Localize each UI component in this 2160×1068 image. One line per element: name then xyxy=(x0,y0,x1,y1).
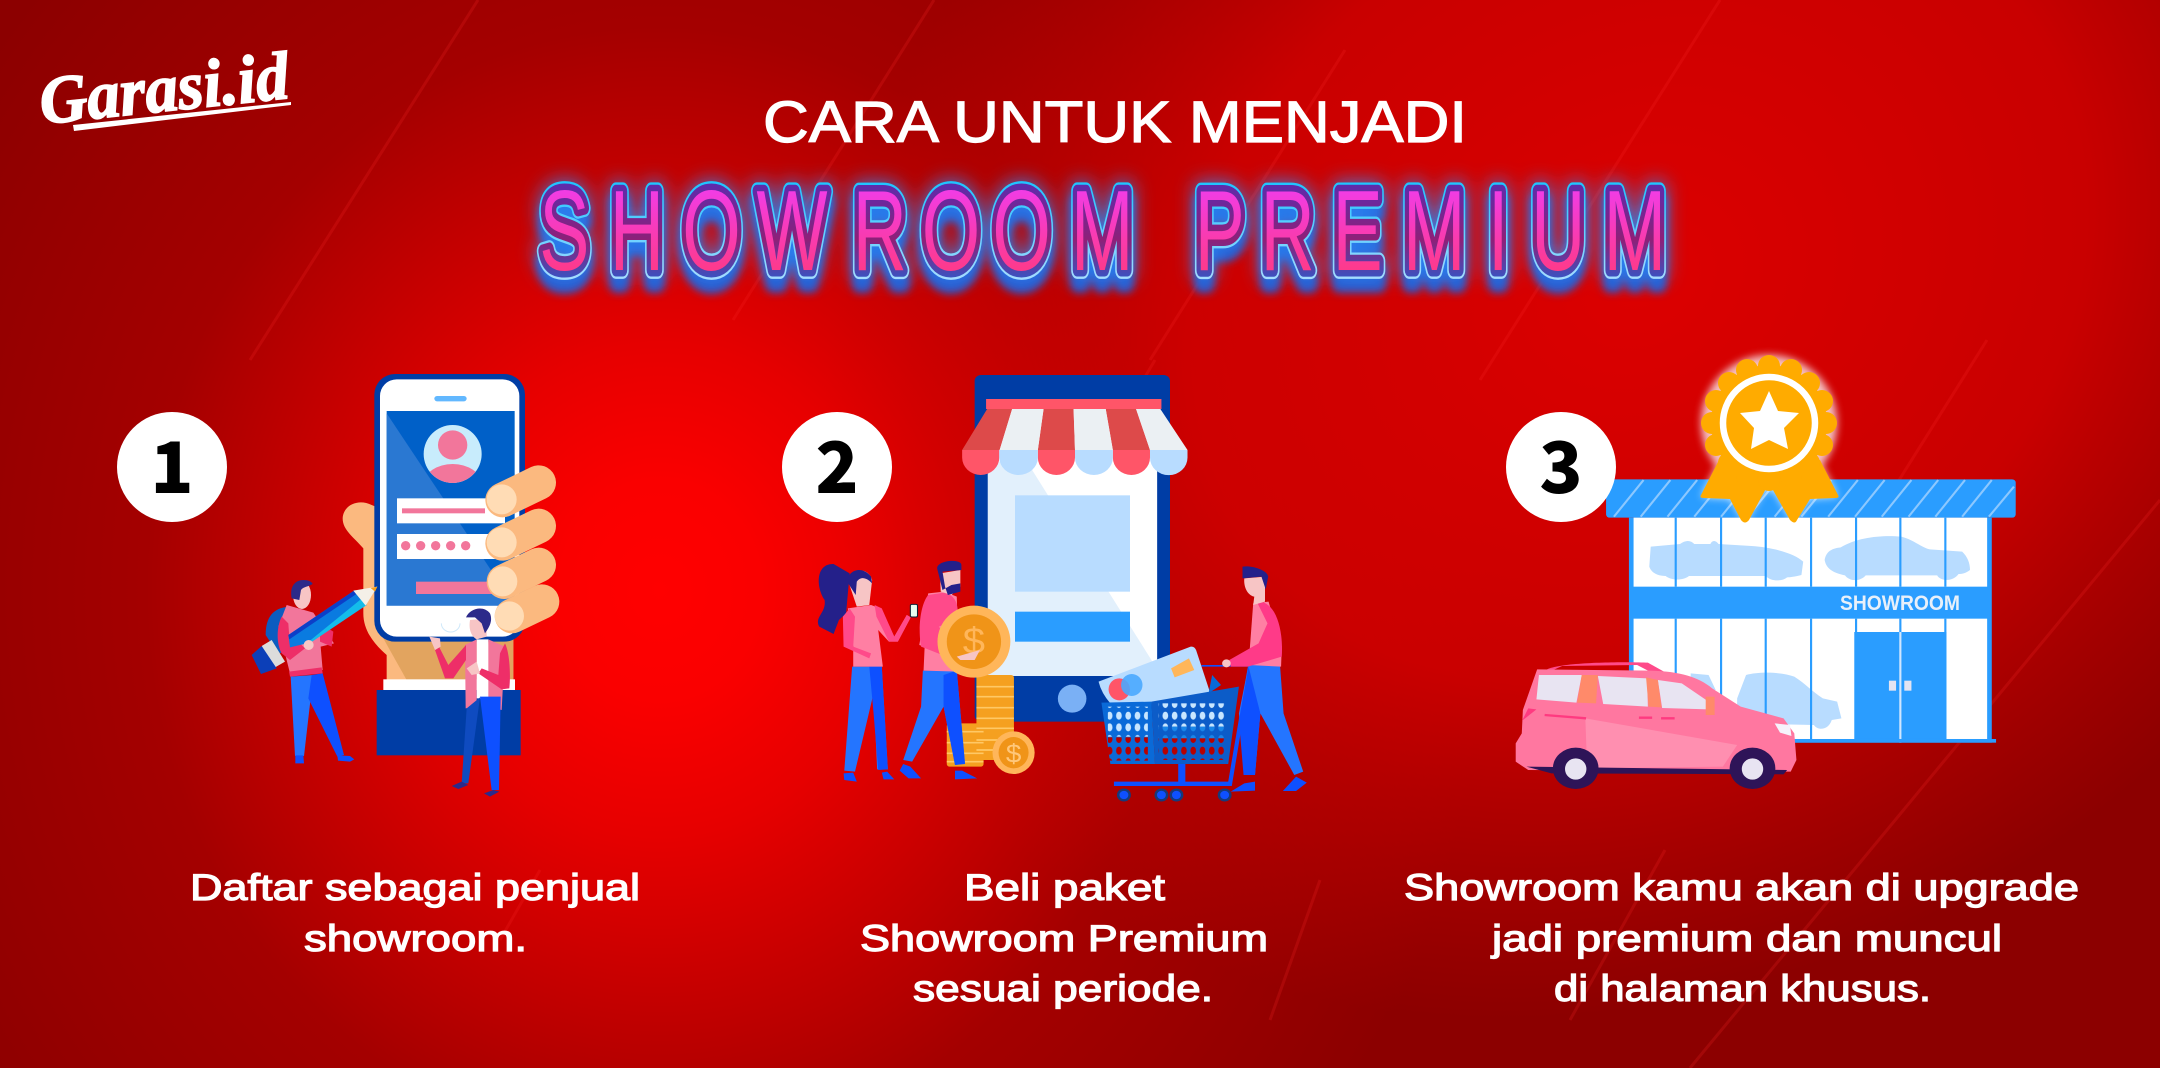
phone xyxy=(374,374,525,642)
neon heading: Showroom Premium: SHOWROOM PREMIUM xyxy=(539,180,1666,307)
number badge 3 and building xyxy=(1506,355,2016,789)
illustration: step 1 registration on phone xyxy=(252,374,542,797)
caption step 2: Beli paket xyxy=(964,867,1166,908)
person with pencil xyxy=(252,580,377,763)
neon heading: Showroom Premium: SHOWROOM PREMIUM xyxy=(539,168,1666,295)
shopping cart xyxy=(1099,647,1251,800)
neon heading: Showroom Premium: SHOWROOM PREMIUM xyxy=(539,168,1666,295)
caption step 2: sesuai periode. xyxy=(913,968,1213,1009)
number 3: 3 xyxy=(1539,412,1583,514)
number badge 1: 1 xyxy=(150,412,194,514)
caption step 1: Daftar sebagai penjual xyxy=(190,867,640,908)
caption step 2: Showroom Premium xyxy=(860,918,1268,959)
number badge 2: 2 xyxy=(815,412,859,514)
number badge 2 xyxy=(782,412,892,522)
caption step 3: Showroom kamu akan di upgrade xyxy=(1404,867,2079,908)
caption step 1: showroom. xyxy=(304,918,527,959)
neon heading: Showroom Premium: SHOWROOM PREMIUM xyxy=(539,168,1666,295)
hand xyxy=(343,502,521,755)
caption step 2 xyxy=(860,867,1268,1009)
man with coin xyxy=(900,561,1010,779)
title: Cara untuk menjadi: CARA UNTUK MENJADI xyxy=(763,90,1467,155)
illustration: step 3 showroom building xyxy=(1606,479,2016,743)
neon heading: Showroom Premium: SHOWROOM PREMIUM xyxy=(539,168,1666,295)
coin stacks xyxy=(947,675,1035,774)
number 3 xyxy=(1506,412,1616,522)
caption step 3: di halaman khusus. xyxy=(1554,968,1931,1009)
caption step 1 xyxy=(190,867,640,959)
award badge xyxy=(1700,355,1839,523)
shop phone xyxy=(975,375,1170,722)
logo: Garasi.id: Garasi.id xyxy=(36,37,293,139)
pink car xyxy=(1516,662,1796,789)
caption step 3 xyxy=(1404,867,2079,1009)
number badge 1 xyxy=(117,412,227,522)
woman with phone xyxy=(818,564,917,782)
man with cart xyxy=(1222,566,1307,792)
man with coin: $ xyxy=(963,621,985,662)
pencil xyxy=(252,587,377,674)
caption step 3: jadi premium dan muncul xyxy=(1491,918,2002,959)
showroom sign: SHOWROOM xyxy=(1840,592,1960,615)
awning xyxy=(962,399,1187,475)
fingers xyxy=(487,483,542,631)
illustration: step 2 buying package xyxy=(818,375,1307,800)
person standing at phone xyxy=(429,609,510,797)
coin stacks: $ xyxy=(1006,740,1021,768)
